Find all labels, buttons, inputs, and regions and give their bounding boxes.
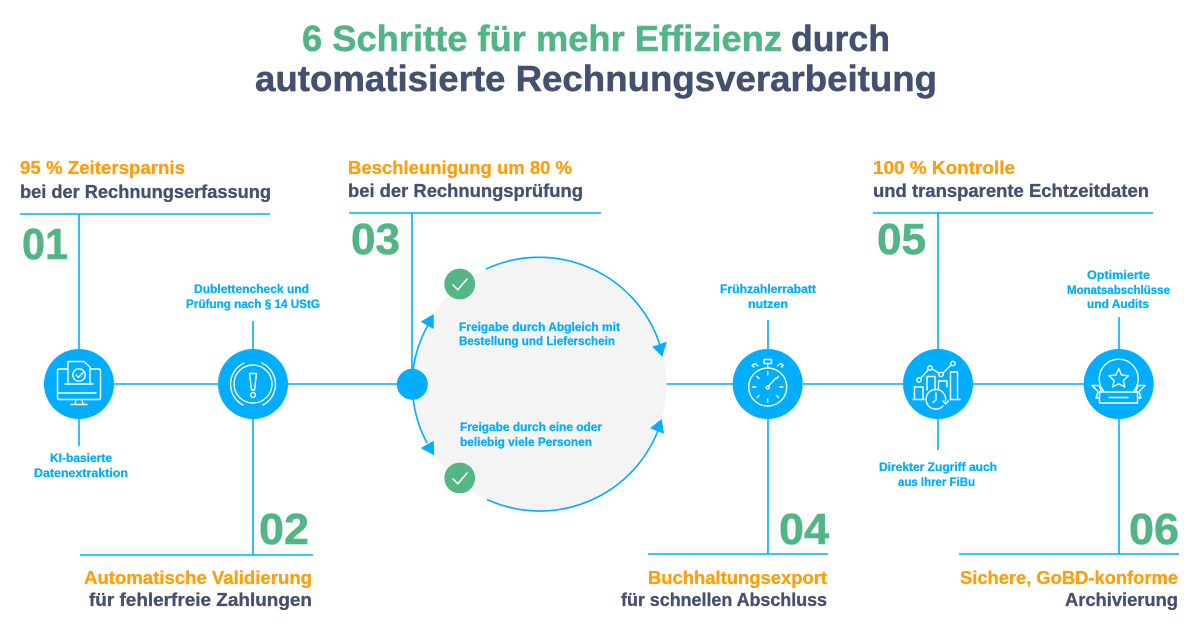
step 06 leader lines [959, 317, 1179, 554]
label: Optimierte Monatsabschlüsse: Optimierte [1087, 270, 1150, 282]
step 04 number: 04 [779, 505, 830, 554]
title: durch [791, 18, 890, 59]
label: Freigabe durch Personen: Freigabe durch eine oder [460, 422, 603, 434]
step 04 heading: für schnellen Abschluss [621, 590, 827, 610]
label: KI-basierte Datenextraktion: Datenextraktion [34, 468, 128, 480]
step 02 heading [84, 568, 312, 610]
step 02 heading: für fehlerfreie Zahlungen [89, 590, 312, 610]
label: Direkter Zugriff: aus Ihrer FiBu [898, 477, 975, 489]
icon: charts with clock [903, 349, 973, 419]
step 01 number: 01 [22, 220, 68, 269]
label: Direkter Zugriff: Direkter Zugriff auch [879, 462, 997, 474]
label: Dublettencheck: Dublettencheck und [194, 284, 309, 296]
step 05 heading: 100 % Kontrolle [873, 158, 1015, 178]
panel: big grey approval circle [412, 257, 667, 511]
step 06 heading [960, 568, 1178, 610]
step 03 number: 03 [351, 215, 400, 264]
step 06 heading: Sichere, GoBD-konforme [960, 568, 1178, 588]
main connector line [114, 383, 1084, 385]
step 04 leader lines [648, 320, 828, 554]
icon: stopwatch [733, 349, 803, 419]
label: Optimierte Monatsabschlüsse: Monatsabschlüsse [1067, 285, 1170, 297]
step 02 leader lines [80, 321, 313, 555]
label: Frühzahlerrabatt: Frühzahlerrabatt [720, 284, 816, 296]
label: Freigabe durch Abgleich [459, 322, 620, 348]
step 04 heading: Buchhaltungsexport [648, 568, 827, 588]
label: Direkter Zugriff [879, 462, 997, 489]
label: KI-basierte Datenextraktion: KI-basierte [50, 453, 112, 465]
step 01 heading: 95 % Zeitersparnis [20, 158, 185, 178]
label: Dublettencheck [186, 284, 320, 311]
title: automatisierte Rechnungsverarbeitung [255, 58, 937, 99]
step 02 heading: Automatische Validierung [84, 568, 312, 588]
label: Freigabe durch Abgleich: Freigabe durch Abgleich mit [459, 322, 620, 334]
label: Frühzahlerrabatt: nutzen [748, 299, 788, 311]
label: Frühzahlerrabatt [720, 284, 816, 311]
step 04 heading [621, 568, 827, 610]
step 06 heading: Archivierung [1065, 590, 1178, 610]
label: Freigabe durch Abgleich: Bestellung und Lieferschein [459, 336, 615, 348]
step 05 heading: und transparente Echtzeitdaten [873, 181, 1149, 201]
step 03 heading [348, 158, 583, 201]
label: Optimierte Monatsabschlüsse: und Audits [1087, 299, 1149, 311]
title [255, 18, 937, 99]
label: Dublettencheck: Prüfung nach § 14 UStG [186, 299, 320, 311]
step 05 leader lines [873, 213, 1153, 450]
label: Freigabe durch Personen: beliebig viele Personen [460, 437, 592, 449]
icon: check bottom [444, 463, 475, 493]
step 03 leader lines [349, 213, 601, 372]
icon: monitor with document [44, 349, 114, 419]
label: Freigabe durch Personen [460, 422, 603, 449]
step 01 leader lines [20, 214, 270, 446]
icon: warning exclamation [218, 349, 288, 419]
icon: check top [444, 269, 475, 299]
title: 6 Schritte für mehr Effizienz [302, 18, 782, 59]
step 01 heading: bei der Rechnungserfassung [20, 182, 271, 202]
label: Optimierte Monatsabschlüsse [1067, 270, 1170, 311]
step 01 heading [20, 158, 271, 202]
step 03 node [397, 369, 428, 400]
step 03 heading: bei der Rechnungsprüfung [348, 181, 583, 201]
step 02 number: 02 [259, 505, 309, 554]
step 05 number: 05 [877, 215, 926, 264]
step 06 number: 06 [1129, 505, 1179, 554]
step 05 heading [873, 158, 1149, 201]
label: KI-basierte Datenextraktion [34, 453, 128, 480]
icon: award badge [1084, 349, 1154, 419]
step 03 heading: Beschleunigung um 80 % [348, 158, 572, 178]
